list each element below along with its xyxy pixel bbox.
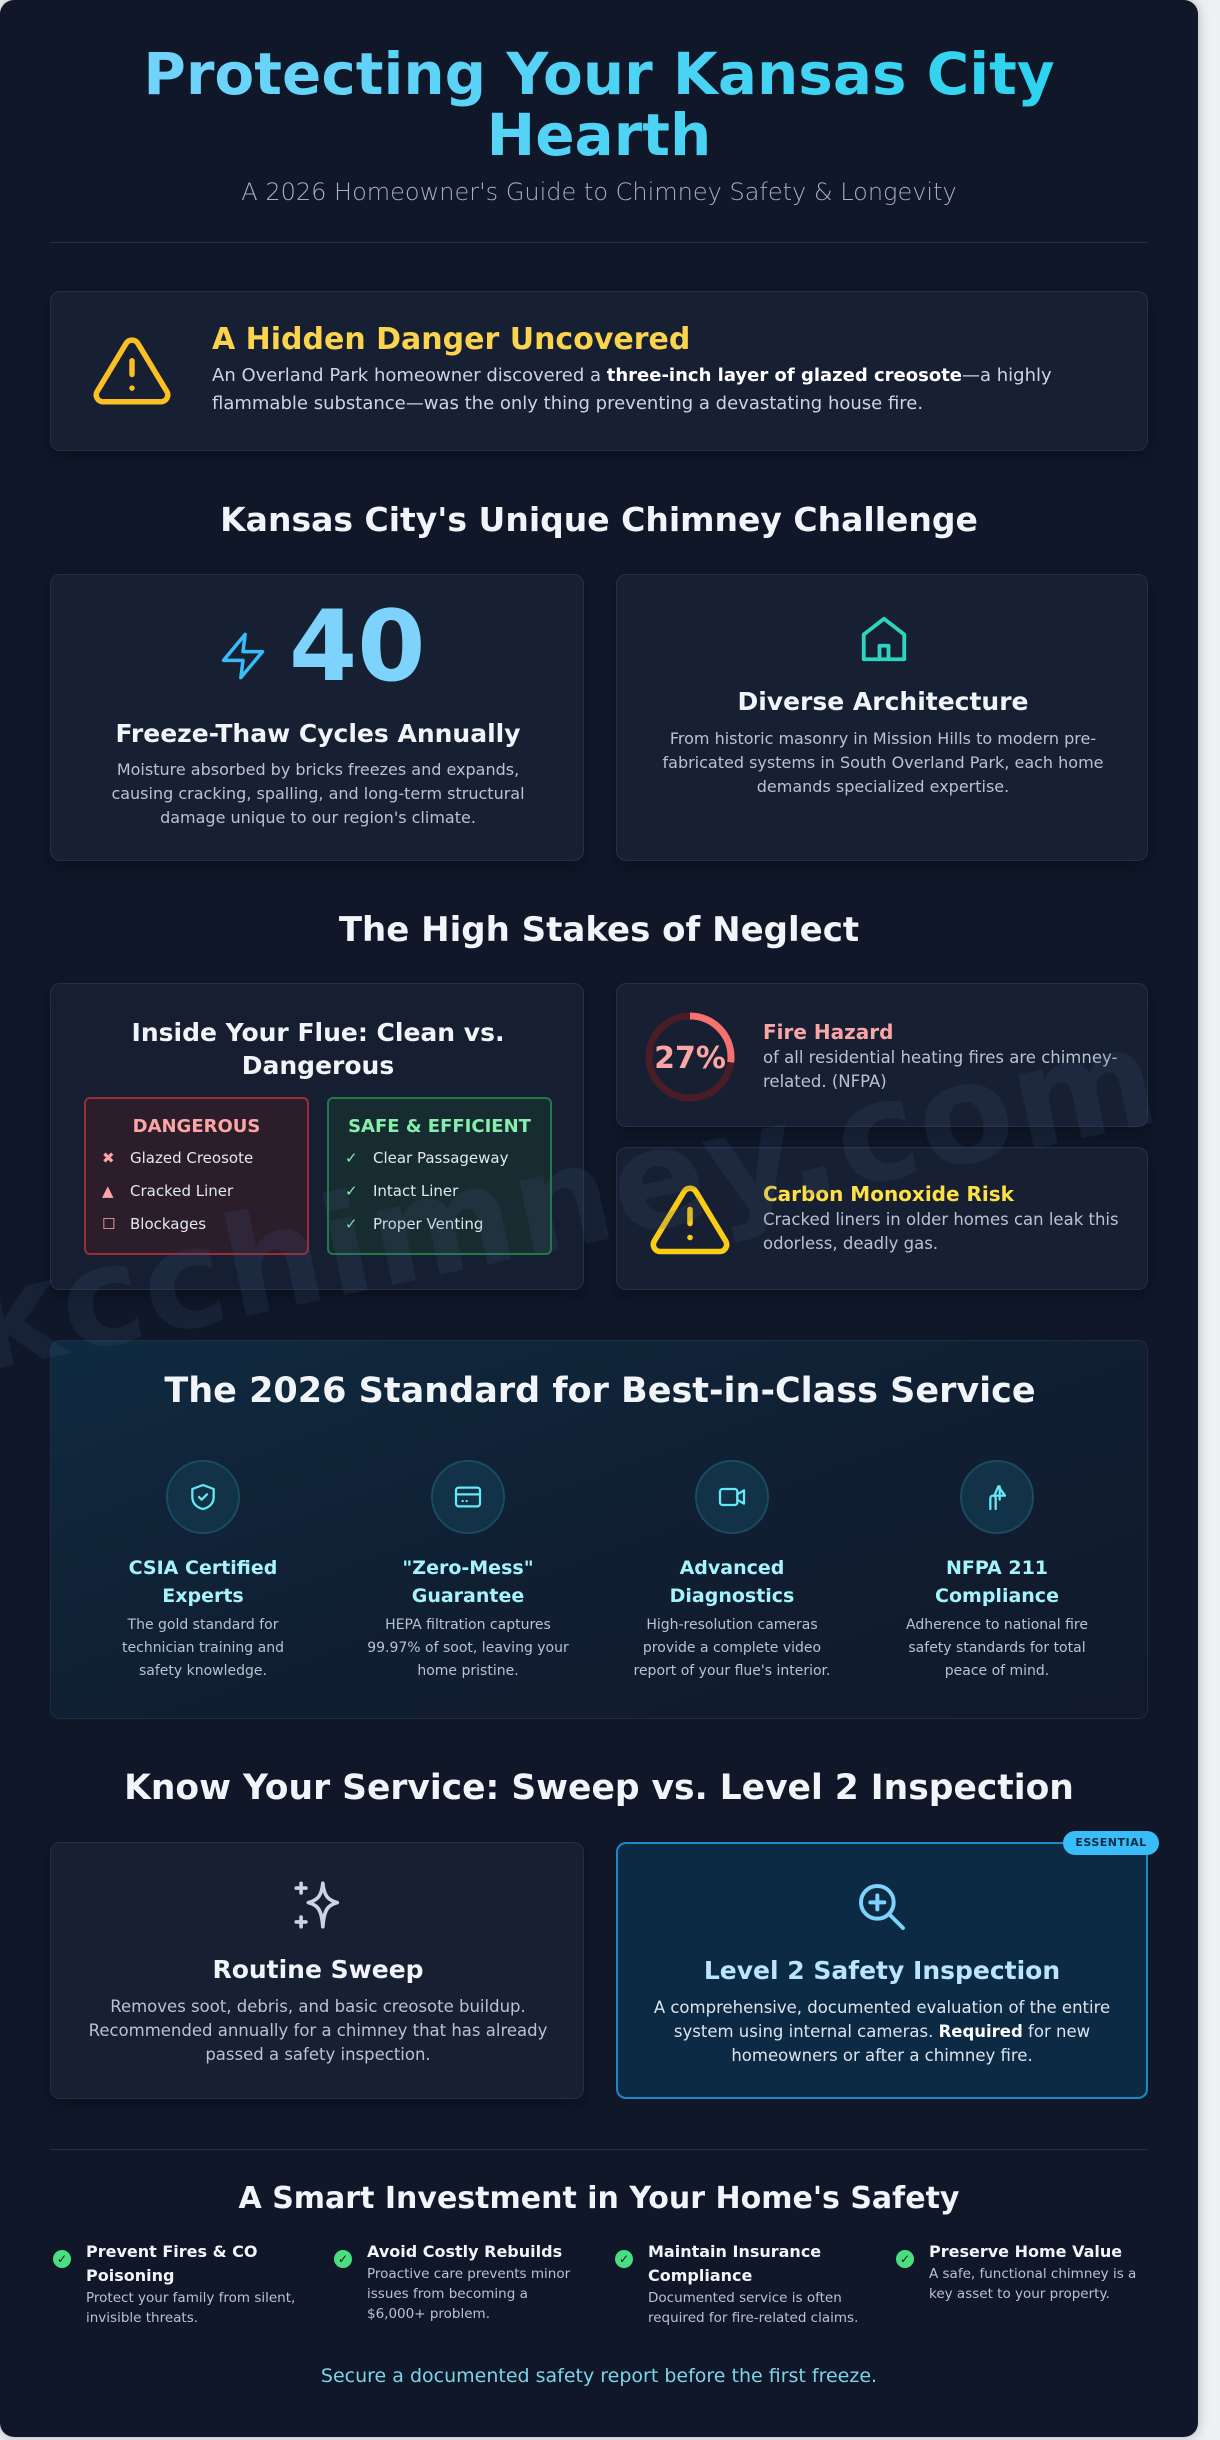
benefit: avoid rebuilds: Proactive care prevents minor issues from becoming a $6,000+ problem. [367,2266,570,2322]
box: safe: ✓ [345,1182,358,1200]
panel: level 2 inspection: A comprehensive, documented evaluation of the entire system using internal cameras. Required for new homeowners or after a chimney fire. [654,1998,1110,2065]
chart: 27% ring: 27% [654,1041,726,1076]
title: Protecting Your Kansas City [143,40,1055,108]
callout text [212,322,1052,414]
feature: diagnostics: Diagnostics [670,1585,794,1607]
benefit: home value [896,2242,1136,2302]
feature: NFPA: NFPA 211 [946,1557,1048,1579]
benefit: insurance: Maintain Insurance Compliance [648,2242,821,2285]
panel: freeze-thaw [50,574,584,861]
box: dangerous: Cracked Liner [130,1182,233,1200]
box: dangerous: Glazed Creosote [130,1149,253,1167]
panel: fire hazard: of all residential heating fires are chimney-related. (NFPA) [763,1048,1117,1091]
panel: fire hazard [616,983,1148,1127]
box: safe: Clear Passageway [373,1149,508,1167]
panel: level 2 inspection: Level 2 Safety Inspection [704,1956,1060,1985]
icon: warning [93,337,171,404]
panel: carbon monoxide [616,1147,1148,1290]
benefit: avoid rebuilds [334,2242,570,2322]
icon: sparkle [294,1881,340,1929]
feature: CSIA: CSIA Certified [129,1557,277,1579]
benefit: insurance: ✓ [619,2252,629,2266]
feature: zero mess: "Zero-Mess" [402,1557,534,1579]
title [0,44,1198,166]
benefit: avoid rebuilds: Avoid Costly Rebuilds [367,2242,562,2261]
stat 40: 40 [289,590,425,704]
icon: magnifier [859,1884,906,1930]
panel: 2026 standard: The 2026 Standard for Best-in-Class Service [164,1371,1036,1411]
callout: hidden danger [50,291,1148,451]
subtitle: A 2026 Homeowner's Guide to Chimney Safety & Longevity [241,178,957,206]
panel: 2026 standard [50,1340,1148,1719]
box: dangerous: Blockages [130,1215,206,1233]
box: dangerous: ✖ [102,1149,115,1167]
badge: essential [1063,1831,1159,1855]
heading: know your service: Know Your Service: Sweep vs. Level 2 Inspection [124,1768,1074,1808]
stat 40 [222,590,425,704]
panel: routine sweep: Routine Sweep [212,1955,424,1984]
heading: high stakes: The High Stakes of Neglect [339,910,859,950]
feature: NFPA: Adherence to national fire safety standards for total peace of mind. [906,1617,1088,1679]
panel: level 2 inspection [616,1842,1148,2099]
footer cta: Secure a documented safety report before the first freeze. [321,2365,877,2387]
benefit: prevent fires: Prevent Fires & CO Poisoning [86,2242,257,2285]
feature: zero mess [367,1460,569,1679]
box: safe: SAFE & EFFICIENT [348,1116,531,1137]
benefit: insurance: Documented service is often required for fire-related claims. [648,2290,858,2326]
feature: CSIA [122,1460,284,1679]
callout text: An Overland Park homeowner discovered a three-inch layer of glazed creosote—a highly flammable substance—was the only thing preventing a devastating house fire. [212,365,1052,414]
box: safe: Proper Venting [373,1215,483,1233]
benefits list [53,2242,1136,2326]
feature: CSIA: The gold standard for technician training and safety knowledge. [122,1617,284,1679]
feature: diagnostics: High-resolution cameras provide a complete video report of your flue's interior. [634,1617,830,1679]
panel: routine sweep [50,1842,584,2099]
icon: warning [650,1186,730,1254]
benefit: home value: A safe, functional chimney is a key asset to your property. [929,2266,1136,2302]
benefit: insurance [615,2242,858,2326]
feature: diagnostics: Advanced [680,1557,784,1579]
box: safe: ✓ [345,1215,358,1233]
feature: diagnostics [634,1460,830,1679]
box: safe [327,1097,552,1255]
title: Hearth [487,101,711,169]
benefit: prevent fires [53,2242,295,2326]
panel: flue comparison: Dangerous [242,1051,394,1080]
benefit: prevent fires: Protect your family from silent, invisible threats. [86,2290,295,2326]
benefit: home value: ✓ [900,2252,910,2266]
box: dangerous: ☐ [102,1215,115,1233]
icon: house [862,616,906,662]
panel: flue comparison: Inside Your Flue: Clean vs. [132,1018,504,1047]
panel: routine sweep: Removes soot, debris, and basic creosote buildup. Recommended annually for a chimney that has already passed a safety inspection. [89,1997,547,2064]
heading: smart investment: A Smart Investment in Your Home's Safety [239,2181,959,2216]
box: safe: ✓ [345,1149,358,1167]
benefit: home value: Preserve Home Value [929,2242,1122,2261]
feature: zero mess: Guarantee [412,1585,524,1607]
panel: carbon monoxide: Cracked liners in older homes can leak this odorless, deadly gas. [763,1210,1119,1253]
box: dangerous: ▲ [102,1182,114,1200]
panel: diverse architecture [616,574,1148,861]
callout text: A Hidden Danger Uncovered [212,322,690,357]
heading: unique challenge: Kansas City's Unique Chimney Challenge [220,500,978,539]
box: dangerous: DANGEROUS [133,1116,260,1137]
box: dangerous [84,1097,309,1255]
badge: essential: ESSENTIAL [1075,1836,1147,1849]
feature: CSIA: Experts [162,1585,244,1607]
panel: freeze-thaw: Moisture absorbed by bricks freezes and expands, causing cracking, spalling, and long-term structural damage unique to our region's climate. [111,760,525,827]
box: safe: Intact Liner [373,1182,458,1200]
panel: diverse architecture: Diverse Architecture [737,687,1029,716]
feature: zero mess: HEPA filtration captures 99.97% of soot, leaving your home pristine. [367,1617,569,1679]
panel: flue comparison [50,983,584,1290]
benefit: prevent fires: ✓ [57,2252,67,2266]
panel: fire hazard: Fire Hazard [763,1020,893,1044]
benefit: avoid rebuilds: ✓ [338,2252,348,2266]
feature: NFPA [906,1460,1088,1679]
feature: NFPA: Compliance [935,1585,1059,1607]
panel: freeze-thaw: Freeze-Thaw Cycles Annually [115,719,521,748]
chart: 27% ring [646,1012,734,1102]
panel: carbon monoxide: Carbon Monoxide Risk [763,1182,1014,1206]
panel: diverse architecture: From historic masonry in Mission Hills to modern pre-fabricated systems in South Overland Park, each home demands specialized expertise. [662,729,1104,796]
